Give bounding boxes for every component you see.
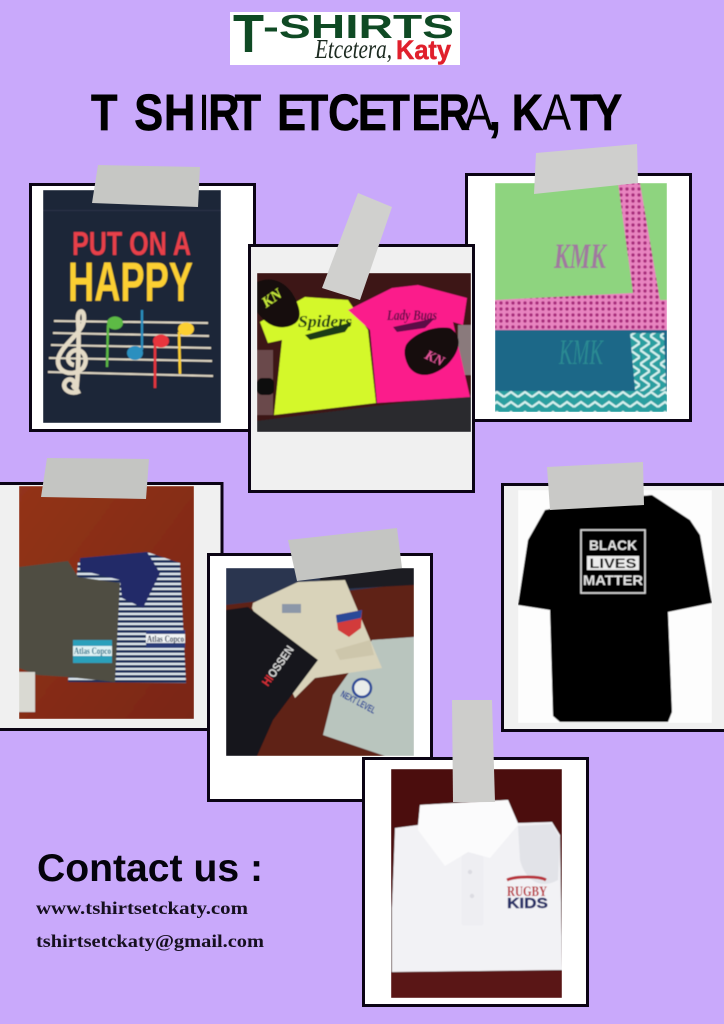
title: T SHIRT ETCETERA, KATY: [91, 85, 622, 142]
logo: T: [233, 4, 264, 64]
panel: atlas copco polos: [0, 458, 222, 730]
panel: rugby kids polo: [364, 700, 588, 1006]
contact heading: Contact us :: [37, 847, 263, 890]
shirt slogan: HAPPY: [68, 250, 193, 313]
photo: work shirts on table: [226, 568, 414, 756]
yellow shirt: [260, 297, 376, 415]
rugby kids logo: KIDS: [507, 895, 548, 912]
logo: Etcetera,: [314, 34, 392, 64]
panel: work shirts: [208, 528, 432, 800]
tape: [534, 144, 638, 194]
logo: Katy: [396, 35, 451, 65]
shirt slogan: [70, 230, 194, 302]
logo: [230, 4, 460, 65]
olive polo: Atlas Copco: [74, 646, 111, 656]
beige shirt: [252, 580, 382, 698]
panel: neon team shirts: [250, 193, 474, 492]
panel: black lives matter shirt: [502, 462, 724, 730]
gray shirt: NEXT LEVEL: [339, 689, 377, 717]
photo: polos on wood table: [19, 486, 194, 719]
photo: black shirt: [518, 490, 712, 723]
photo: neon shirts and hats: [257, 273, 471, 432]
right hat: KN: [421, 348, 447, 370]
tape: [452, 700, 495, 802]
striped polo: Atlas Copco: [147, 634, 184, 644]
black shirt: HIOSSEN: [259, 643, 297, 689]
rugby kids logo: [507, 877, 548, 912]
photo: green and blue towels: [495, 183, 667, 412]
email: tshirtsetckaty@gmail.com: [36, 931, 264, 951]
tape: [41, 458, 149, 499]
panel: put on a happy shirt: [30, 165, 254, 430]
black shirt: [226, 607, 318, 756]
monogram green towel: KMK: [553, 236, 608, 276]
hang tag: [19, 672, 35, 712]
monogram blue towel: KMK: [558, 332, 604, 372]
shirt slogan: PUT ON A: [72, 225, 191, 262]
slogan box: LIVES: [590, 556, 636, 571]
right hat: [405, 327, 459, 375]
gray shirt: [323, 637, 414, 756]
pink shirt: Lady Bugs: [386, 308, 437, 324]
tape: [547, 462, 644, 510]
left hat: [257, 279, 300, 327]
panel: monogrammed towels: [466, 144, 690, 420]
tape: [288, 528, 402, 581]
slogan box: [581, 530, 645, 593]
slogan box: BLACK: [589, 538, 637, 553]
striped polo: [68, 552, 186, 683]
left hat: KN: [258, 286, 286, 312]
tape: [92, 165, 200, 207]
pink shirt: [348, 285, 470, 403]
music staff with notes: [48, 310, 213, 393]
photo: navy shirt with music notes: [43, 190, 221, 423]
rugby kids logo: RUGBY: [507, 884, 547, 900]
slogan box: MATTER: [583, 573, 643, 588]
olive polo: [19, 561, 120, 682]
tape: [322, 193, 392, 300]
yellow shirt: Spiders: [298, 312, 352, 331]
logo: -SHIRTS: [263, 8, 454, 45]
website: www.tshirtsetckaty.com: [36, 898, 248, 918]
photo: white polo: [391, 769, 562, 998]
